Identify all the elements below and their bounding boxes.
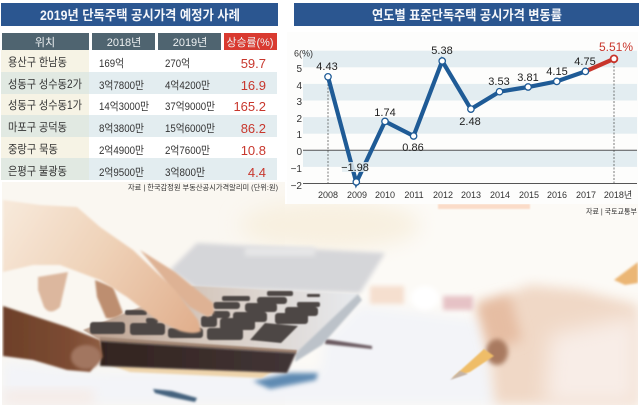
- table header row: 2019년: [173, 36, 207, 49]
- table title bar: [1, 3, 278, 26]
- table increase rates: 86.2: [241, 121, 266, 136]
- data value labels: 4.75: [574, 56, 596, 68]
- table locations: [8, 56, 82, 178]
- x axis labels: [318, 190, 632, 200]
- table 2019 prices: 4억4200만: [165, 79, 210, 92]
- calculator front: [100, 341, 296, 373]
- panel: yearly price change line chart: [287, 3, 639, 216]
- table increase rates: 59.7: [241, 56, 266, 71]
- x axis labels: 2009: [347, 190, 367, 200]
- table locations: 성동구 성수동2가: [8, 78, 82, 91]
- x axis labels: 2014: [490, 190, 510, 200]
- table 2019 prices: 270억: [165, 57, 190, 70]
- y axis labels: 3: [296, 97, 302, 108]
- table locations: 용산구 한남동: [8, 56, 67, 69]
- data value labels: 2.48: [459, 116, 481, 128]
- y axis labels: 6(%): [294, 48, 313, 58]
- table 2019 prices: 37억9000만: [165, 100, 215, 113]
- table 2019 prices: 3억800만: [165, 166, 205, 179]
- calculator front lip: [100, 337, 297, 354]
- table increase rates: 165.2: [233, 99, 266, 114]
- data value labels: [316, 45, 596, 174]
- x axis labels: 2015: [519, 190, 539, 200]
- table 2018 prices: [99, 57, 149, 179]
- background photo: hands using a calculator: [0, 180, 640, 408]
- table header row: 2018년: [107, 36, 141, 49]
- table source note: 자료 | 한국감정원 부동산공시가격알리미 (단위:원): [128, 182, 278, 192]
- data markers: [325, 58, 589, 185]
- table header row: 위치: [35, 36, 55, 49]
- table locations: 중랑구 묵동: [8, 143, 58, 156]
- table header row: 상승률(%): [226, 36, 274, 49]
- chart bands: [303, 51, 637, 167]
- x axis labels: 2012: [433, 190, 453, 200]
- data value labels: 3.53: [488, 76, 510, 88]
- y axis labels: 2: [296, 114, 302, 125]
- x axis labels: 2011: [404, 190, 424, 200]
- table 2018 prices: 169억: [99, 57, 124, 70]
- chart axes: [303, 150, 637, 184]
- table locations: 은평구 불광동: [8, 165, 67, 178]
- calculator right side: [295, 294, 362, 362]
- highlighted 2018 value: 5.51%: [599, 40, 633, 54]
- data value labels: 0.86: [402, 142, 424, 154]
- x axis labels: 2016: [547, 190, 567, 200]
- y axis labels: [291, 48, 313, 192]
- x axis labels: 2008: [318, 190, 338, 200]
- data value labels: 4.43: [316, 61, 338, 73]
- y axis labels: 4: [296, 81, 302, 92]
- chart title bar: [294, 3, 639, 26]
- thumb: [3, 306, 103, 372]
- panel: housing price table: [1, 3, 278, 192]
- table increase rates: 16.9: [241, 78, 266, 93]
- table 2019 prices: [165, 57, 215, 179]
- table 2019 prices: 2억7600만: [165, 144, 210, 157]
- calculator display section: [170, 243, 385, 293]
- highlighted 2018 marker: [611, 55, 617, 62]
- chart source note: 자료 | 국토교통부: [586, 207, 637, 216]
- drop lines: [328, 59, 614, 183]
- paper under calculator: [2, 305, 500, 405]
- table increase rates: 4.4: [248, 165, 266, 180]
- table 2018 prices: 2억9500만: [99, 166, 144, 179]
- calculator top surface: [83, 286, 358, 353]
- data value labels: 3.81: [517, 72, 539, 84]
- data value labels: 1.74: [374, 107, 396, 119]
- table 2018 prices: 8억3800만: [99, 122, 144, 135]
- y axis labels: 5: [296, 64, 302, 75]
- keys: [90, 291, 320, 343]
- table increase rates: 10.8: [241, 143, 266, 158]
- table 2018 prices: 3억7800만: [99, 79, 144, 92]
- x axis labels: 2010: [375, 190, 395, 200]
- table title bar: 2019년 단독주택 공시가격 예정가 사례: [40, 8, 240, 23]
- table header row: [2, 33, 277, 50]
- table 2018 prices: 14억3000만: [99, 100, 149, 113]
- upper hand and pressing fingers: [3, 200, 214, 333]
- dangling rear fingers: [38, 272, 123, 318]
- blue line series: [328, 61, 585, 182]
- data value labels: 5.38: [431, 45, 453, 57]
- y axis labels: −1: [291, 164, 302, 175]
- table body backgrounds: [1, 50, 277, 180]
- x axis labels: 2013: [461, 190, 481, 200]
- y axis labels: 1: [296, 130, 302, 141]
- blurred hand with pencil: [370, 262, 638, 405]
- table 2018 prices: 2억4900만: [99, 144, 144, 157]
- data value labels: −1.98: [341, 162, 369, 174]
- table 2019 prices: 15억6000만: [165, 122, 215, 135]
- y axis labels: −2: [291, 181, 302, 192]
- y axis labels: 0: [296, 147, 302, 158]
- table locations: 마포구 공덕동: [8, 121, 67, 134]
- x axis labels: 2017: [576, 190, 596, 200]
- chart title bar: 연도별 표준단독주택 공시가격 변동률: [372, 8, 562, 23]
- chart background: [287, 32, 638, 204]
- table locations: 성동구 성수동1가: [8, 99, 82, 112]
- table increase rates: [233, 56, 266, 180]
- red line series: [585, 59, 614, 71]
- data value labels: 4.15: [546, 66, 568, 78]
- x axis labels: 2018년: [604, 190, 632, 200]
